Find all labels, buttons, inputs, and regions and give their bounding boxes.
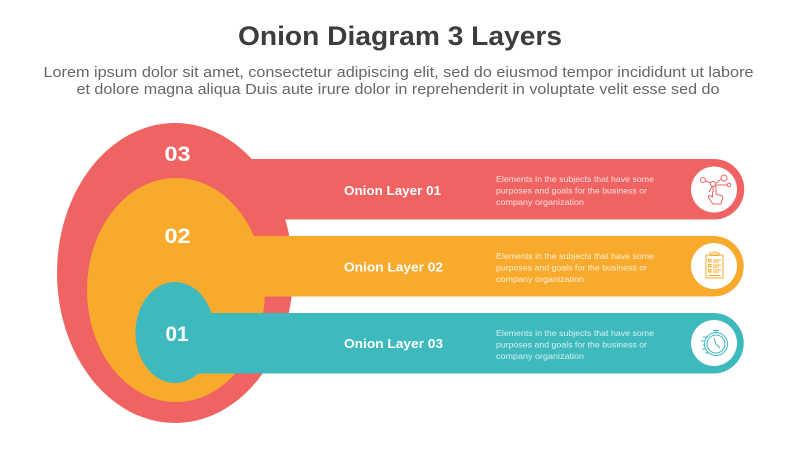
onion layer 01: inner ellipse with bar bbox=[136, 282, 744, 383]
title: Onion Diagram 3 Layers bbox=[238, 21, 562, 51]
layer 02 text: Elements in the subjects that have some bbox=[496, 251, 654, 261]
layer 03 text: company organization bbox=[496, 351, 584, 361]
icon: network touch bbox=[691, 166, 737, 212]
onion layer 03: outer ellipse with bar bbox=[57, 123, 744, 423]
layer 02 text bbox=[344, 251, 654, 284]
layer numbers: 01 bbox=[166, 323, 189, 346]
layer 01 text: Elements in the subjects that have some bbox=[496, 174, 654, 184]
layer 03 text: purposes and goals for the business or bbox=[496, 340, 647, 350]
layer 01 text: purposes and goals for the business or bbox=[496, 186, 647, 196]
layer numbers bbox=[164, 143, 190, 346]
subtitle bbox=[44, 64, 754, 98]
layer numbers: 02 bbox=[164, 225, 190, 248]
icon: stopwatch bbox=[691, 320, 737, 366]
onion layer 02: middle ellipse with bar bbox=[87, 178, 744, 402]
layer 01 text: Onion Layer 01 bbox=[344, 183, 441, 198]
layer 03 text: Elements in the subjects that have some bbox=[496, 328, 654, 338]
layer 01 text bbox=[344, 174, 654, 207]
layer 02 text: company organization bbox=[496, 274, 584, 284]
icon: checklist clipboard bbox=[691, 243, 737, 289]
layer 03 text bbox=[344, 328, 654, 361]
subtitle: et dolore magna aliqua Duis aute irure dolor in reprehenderit in voluptate velit esse sed do bbox=[76, 81, 720, 98]
layer 03 text: Onion Layer 03 bbox=[344, 336, 443, 351]
layer 01 text: company organization bbox=[496, 197, 584, 207]
subtitle: Lorem ipsum dolor sit amet, consectetur adipiscing elit, sed do eiusmod tempor incididunt ut labore bbox=[44, 64, 754, 81]
layer 02 text: Onion Layer 02 bbox=[344, 260, 443, 274]
layer numbers: 03 bbox=[164, 143, 190, 166]
layer 02 text: purposes and goals for the business or bbox=[496, 262, 647, 272]
